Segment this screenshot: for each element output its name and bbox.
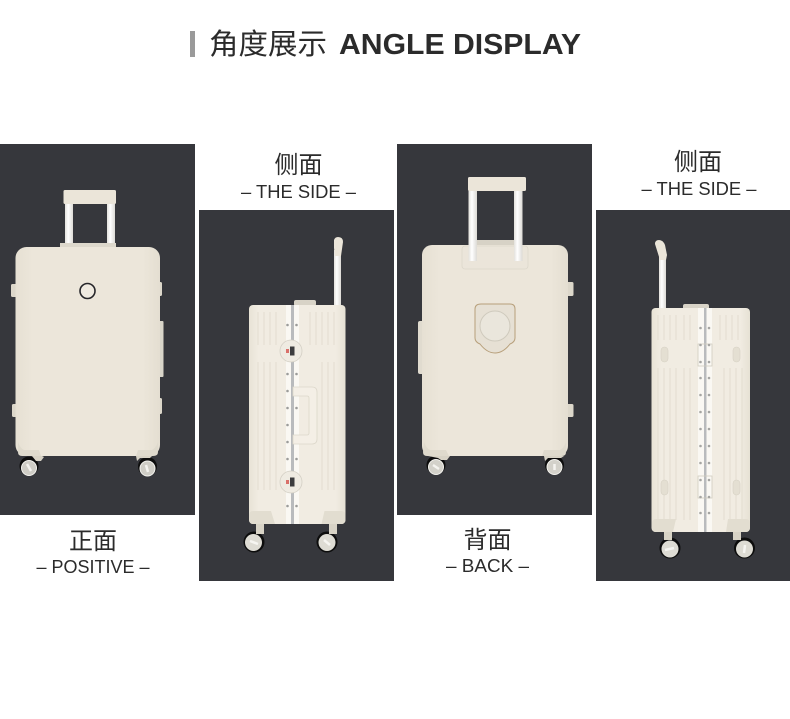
label: positive: 正面 xyxy=(69,528,117,555)
label: the side (left): 侧面 xyxy=(274,152,322,179)
label: positive xyxy=(36,528,150,577)
panel: right side view xyxy=(596,210,790,581)
panel: left side view xyxy=(199,210,394,581)
icon: side grips xyxy=(661,347,740,495)
icon: handle recess xyxy=(462,246,528,269)
label: back xyxy=(446,527,529,576)
title: 角度展示 xyxy=(209,28,327,61)
title: ANGLE DISPLAY xyxy=(339,29,581,61)
label: back: – BACK – xyxy=(446,556,529,576)
icon: cup holder xyxy=(475,304,515,353)
icon: front suitcase xyxy=(11,190,164,476)
label: the side (right): 侧面 xyxy=(674,149,722,176)
label: back: 背面 xyxy=(464,527,512,554)
label: the side (right): – THE SIDE – xyxy=(642,179,756,199)
panel: front view xyxy=(0,144,195,515)
icon: lower lock xyxy=(280,471,302,493)
icon: upper lock xyxy=(280,340,302,362)
icon: back suitcase xyxy=(418,177,574,474)
title xyxy=(190,28,581,61)
label: the side (right) xyxy=(642,149,756,199)
icon: side suitcase with frame xyxy=(652,240,755,558)
label: positive: – POSITIVE – xyxy=(36,557,150,577)
icon: carry handle xyxy=(293,387,317,444)
label: the side (left): – THE SIDE – xyxy=(241,182,356,202)
panel: back view xyxy=(397,144,592,515)
icon: side suitcase with locks xyxy=(244,237,346,552)
label: the side (left) xyxy=(241,152,356,202)
